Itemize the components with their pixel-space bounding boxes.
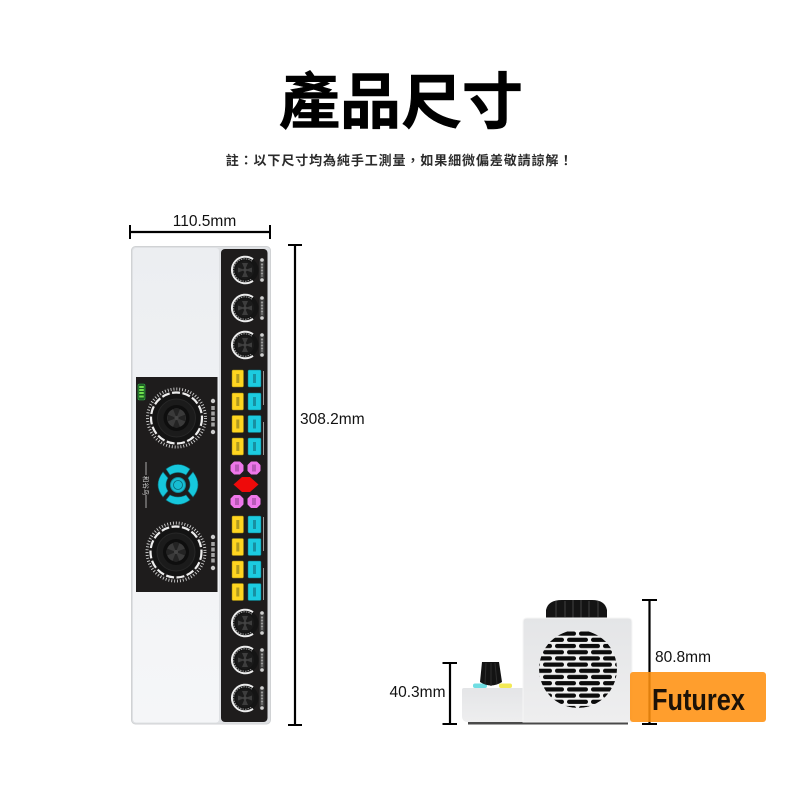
bottom dark foot <box>468 721 628 724</box>
width dimension: 110.5mm: 110.5mm <box>173 213 236 230</box>
upper tower of case <box>523 618 632 722</box>
height dimension: 308.2mm: 308.2mm <box>300 411 365 428</box>
lower knob label <box>211 535 215 570</box>
left white panel <box>133 248 219 722</box>
small knob <box>480 662 502 686</box>
battery indicator <box>138 384 145 400</box>
red diamond button <box>234 477 258 492</box>
colored indicator strips <box>473 684 512 688</box>
upper big knob <box>148 389 206 447</box>
center black display panel <box>136 377 218 592</box>
magenta hexagon buttons <box>232 462 260 507</box>
lower yellow buttons <box>232 516 244 600</box>
upper small knobs <box>232 256 264 358</box>
width dimension: 110.5mm <box>130 213 270 239</box>
lower big knob <box>147 523 205 581</box>
height dimension: 80.8mm: 80.8mm <box>655 649 711 666</box>
device: side view <box>462 600 632 724</box>
device: top view <box>132 246 270 724</box>
upper yellow buttons <box>232 370 244 455</box>
blue direction pad <box>158 464 198 504</box>
height dimension: 40.3mm <box>390 663 457 724</box>
upper knob label <box>211 399 215 434</box>
note text: 註：以下尺寸均為純手工測量，如果細微偏差敬請諒解！ <box>226 153 573 168</box>
vertical brand label <box>142 462 150 508</box>
title: 產品尺寸 <box>279 68 523 136</box>
lower step of case <box>462 688 530 722</box>
watermark badge: Futurex: Futurex <box>652 682 746 717</box>
height dimension: 40.3mm: 40.3mm <box>390 684 446 701</box>
upper blue buttons <box>248 370 264 455</box>
lower small knobs <box>232 610 264 712</box>
right black control strip <box>221 249 268 722</box>
height dimension: 308.2mm <box>288 245 365 725</box>
speaker grille <box>539 630 617 708</box>
height dimension: 80.8mm <box>642 600 711 724</box>
device body <box>132 246 270 724</box>
watermark badge: Futurex <box>630 672 766 722</box>
vertical brand label: 和谷鸟 <box>142 476 150 496</box>
top large knob <box>546 600 607 618</box>
lower blue buttons <box>248 516 264 600</box>
